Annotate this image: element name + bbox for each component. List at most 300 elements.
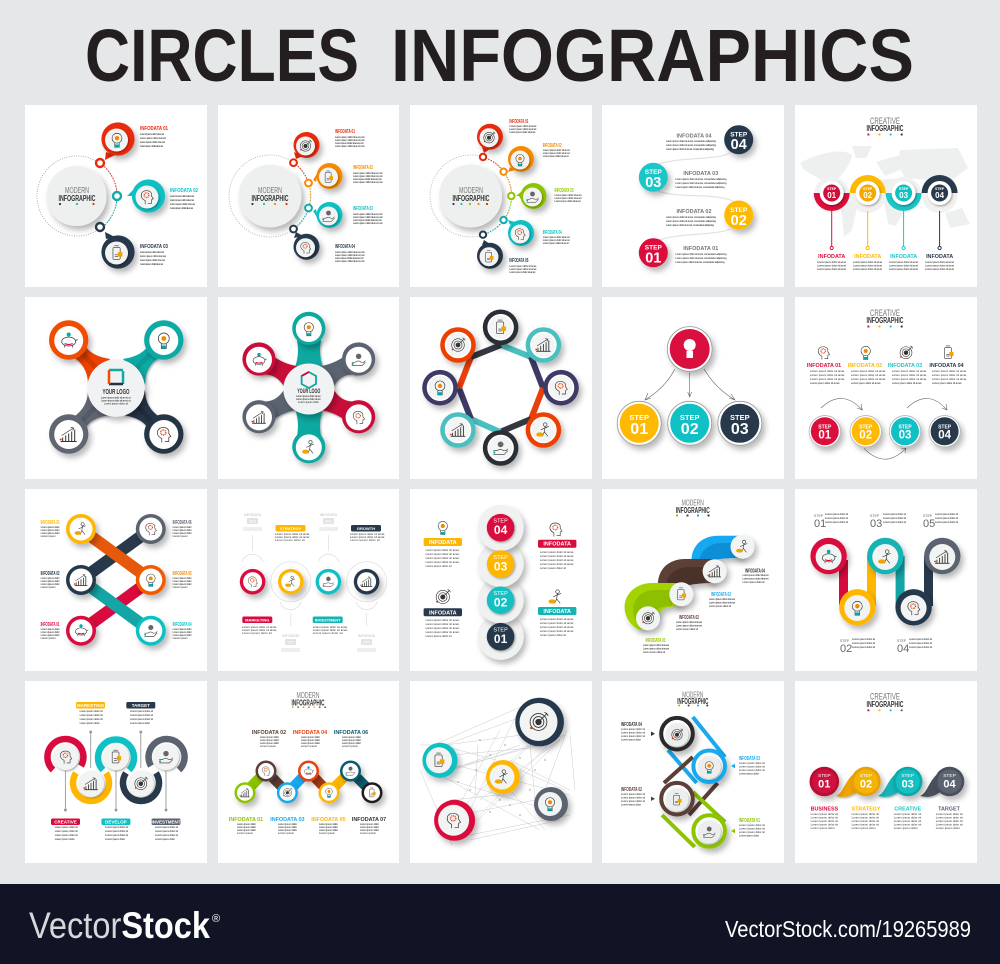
step captions: Lorem ipsum dolor sit xyxy=(825,516,848,520)
step captions: Lorem ipsum dolor sit xyxy=(935,520,958,524)
labels: Lorem ipsum dolor sit xyxy=(709,604,731,608)
labels xyxy=(509,119,582,274)
labels: Lorem ipsum dolor sit amet, con xyxy=(335,141,364,145)
labels: INFODATA 02 xyxy=(41,571,60,577)
labels: Lorem ipsum dolor sit amet xyxy=(676,624,702,628)
labels: INFODATA 02 xyxy=(621,787,642,793)
timeline discs: 03 xyxy=(899,191,909,200)
step 01: 01 xyxy=(494,632,508,646)
step 02 xyxy=(724,200,753,230)
coloured orbit arc xyxy=(483,157,511,235)
drop lines xyxy=(830,211,941,250)
info columns: Lorem ipsum dolor sit amet, xyxy=(892,373,927,377)
labels: INFODATA 01 xyxy=(41,622,60,628)
labels: Lorem ipsum dolor sit amet xyxy=(889,264,918,268)
labels: Lorem ipsum dolor xyxy=(894,826,918,830)
faded percent callouts xyxy=(243,513,376,652)
links xyxy=(245,771,372,793)
step 02: STEP xyxy=(493,591,508,597)
labels: Lorem ipsum dolor xyxy=(173,528,192,532)
centre logo disc: Lorem ipsum dolor sit amet, co xyxy=(101,396,132,400)
labels: INFODATA 03 xyxy=(554,188,574,194)
pills: GROWTH xyxy=(357,526,375,531)
labels: Lorem ipsum dolor sit xyxy=(936,819,963,823)
arcs xyxy=(47,739,185,801)
text blocks: Lorem ipsum dolor sit xyxy=(55,829,78,833)
step 02: 02 xyxy=(494,596,508,610)
labels xyxy=(140,126,198,266)
labels: Lorem ipsum dolor sit xyxy=(852,822,879,826)
step captions: Lorem ipsum dolor sit xyxy=(909,645,932,649)
labels: Lorem ipsum dolor xyxy=(621,738,641,742)
step 03: 03 xyxy=(494,559,508,573)
labels: Lorem ipsum dolor sit amet xyxy=(543,238,570,242)
info columns: Lorem ipsum dolor sit amet, xyxy=(851,369,886,373)
labels: Lorem ipsum dolor sit xyxy=(739,761,765,765)
labels: Lorem ipsum dolor sit amet, con xyxy=(335,253,366,257)
faded percent callouts: 50% xyxy=(249,520,256,524)
panel heading: INFOGRAPHIC xyxy=(866,700,904,709)
panel heading: MODERN xyxy=(682,498,704,508)
step captions: Lorem ipsum dolor sit xyxy=(883,520,906,524)
labels: INFODATA 02 xyxy=(252,730,286,736)
text blocks: Lorem ipsum dolor sit amet, xyxy=(540,554,574,558)
bubbles xyxy=(294,132,342,260)
dashed orbit xyxy=(430,155,512,237)
labels: Lorem ipsum dolor sit amet xyxy=(554,193,582,197)
text blocks: Lorem ipsum dolor sit xyxy=(105,829,128,833)
labels: Lorem ipsum dolor xyxy=(237,825,256,829)
central disc: INFOGRAPHIC xyxy=(452,194,490,203)
labels: Lorem ipsum dolor xyxy=(237,828,256,832)
text blocks: Lorem ipsum dolor sit amet, xyxy=(426,622,460,626)
labels: INFODATA 02 xyxy=(679,615,699,621)
labels: Lorem ipsum dolor xyxy=(936,826,960,830)
labels: INFODATA 06 xyxy=(334,730,368,736)
step captions: STEP xyxy=(814,514,824,518)
labels xyxy=(335,129,384,263)
chain links xyxy=(258,578,366,588)
labels: Lorem ipsum dolor sit xyxy=(621,796,645,800)
labels: CREATIVE xyxy=(894,806,922,812)
text blocks: Lorem ipsum dolor xyxy=(105,837,125,841)
step circles: 03 xyxy=(899,430,911,442)
nodes xyxy=(636,535,754,630)
labels: Lorem ipsum dolor sit amet xyxy=(925,260,954,264)
text blocks: Lorem ipsum dolor xyxy=(55,837,75,841)
step 03: STEP xyxy=(730,413,750,422)
labels: Lorem ipsum dolor sit amet xyxy=(543,241,569,245)
labels: Lorem ipsum dolor sit amet xyxy=(676,620,702,624)
centre logo disc: YOUR LOGO xyxy=(297,388,320,395)
labels: Lorem ipsum dolor sit amet xyxy=(140,132,164,136)
text blocks: Lorem ipsum dolor sit xyxy=(80,709,103,713)
centre logo disc: Lorem ipsum dolor sit am xyxy=(296,394,322,398)
text blocks xyxy=(242,532,385,635)
info columns: Lorem ipsum dolor sit amet, xyxy=(892,377,927,381)
bubble: teal xyxy=(127,179,165,213)
labels: Lorem ipsum dolor sit xyxy=(811,812,838,816)
text blocks: Lorem ipsum dolor sit xyxy=(275,538,305,542)
text blocks: Lorem ipsum dolor xyxy=(130,721,150,725)
panel: 5-step bubble diagram xyxy=(410,105,592,287)
text blocks: Lorem ipsum dolor xyxy=(155,837,175,841)
labels: Lorem ipsum dolor sit amet xyxy=(925,264,954,268)
bubble: red xyxy=(101,122,135,160)
central disc: INFOGRAPHIC xyxy=(58,194,96,203)
labels: Lorem ipsum dolor sit amet xyxy=(140,262,163,266)
labels: INFODATA 01 xyxy=(509,119,528,125)
info columns: Lorem ipsum dolor sit amet, xyxy=(810,373,845,377)
step 01 xyxy=(810,767,839,796)
step 03 xyxy=(639,163,668,192)
info columns: Lorem ipsum dolor sit amet, xyxy=(932,373,967,377)
labels: INFODATA 01 xyxy=(140,126,168,132)
labels: Lorem ipsum dolor sit amet xyxy=(543,235,570,239)
step 02: STEP xyxy=(860,773,872,779)
labels: Lorem ipsum dolor xyxy=(260,735,279,739)
labels: Lorem ipsum dolor sit xyxy=(936,822,963,826)
labels: Lorem ipsum dolor sit xyxy=(621,734,645,738)
text blocks: Lorem ipsum dolor sit xyxy=(313,631,343,635)
timeline discs: STEP xyxy=(827,187,837,191)
text blocks: Lorem ipsum dolor sit amet, xyxy=(540,558,574,562)
labels: Lorem ipsum dolor sit xyxy=(621,792,645,796)
orange node xyxy=(49,320,88,360)
labels: Lorem ipsum dolor sit amet, con xyxy=(353,171,384,175)
labels xyxy=(666,134,727,264)
labels: INFODATA 03 xyxy=(270,817,305,823)
text blocks: Lorem ipsum dolor sit amet, xyxy=(242,628,277,632)
step 02: 02 xyxy=(860,778,872,790)
arm nodes xyxy=(242,312,375,463)
leader lines xyxy=(64,731,167,811)
labels: Lorem ipsum dolor xyxy=(173,579,192,583)
labels: Lorem ipsum dolor sit amet xyxy=(140,140,165,144)
labels: INFODATA 03 xyxy=(140,244,168,250)
info columns: Lorem ipsum dolor sit amet, xyxy=(851,381,881,385)
labels: Lorem ipsum dolor sit xyxy=(621,799,645,803)
pills: INVESTMENT xyxy=(315,617,341,622)
labels: Lorem ipsum dolor sit amet xyxy=(170,206,193,210)
labels: Lorem ipsum dolor xyxy=(852,826,876,830)
text blocks: Lorem ipsum dolor sit amet, xyxy=(426,618,460,622)
labels: Lorem ipsum dolor sit amet xyxy=(543,151,570,155)
labels: INFODATA 01 xyxy=(646,638,666,644)
labels: INFODATA xyxy=(818,254,845,260)
labels: Lorem ipsum dolor xyxy=(173,630,192,634)
labels: Lorem ipsum dolor sit amet, consectetur adipiscing xyxy=(676,177,727,181)
timeline discs: STEP xyxy=(863,187,873,191)
labels: Lorem ipsum dolor xyxy=(319,828,338,832)
step 02 xyxy=(851,767,881,796)
step captions: STEP xyxy=(840,639,850,643)
step 01 xyxy=(639,238,668,267)
ring: blue xyxy=(693,750,725,782)
panel: twisted ribbon steps xyxy=(795,681,977,863)
labels: INFODATA 05 xyxy=(311,817,346,823)
labels: INFODATA 05 xyxy=(509,258,528,264)
panel heading xyxy=(866,692,904,711)
step circles: 02 xyxy=(859,430,872,442)
step 03: 03 xyxy=(731,421,749,438)
labels: Lorem ipsum dolor sit amet, con xyxy=(353,174,384,178)
centre logo disc: Lorem ipsum dolor xyxy=(298,400,319,404)
labels: Lorem ipsum dolor sit amet, consectetur adipiscing xyxy=(666,139,716,143)
labels: Lorem ipsum dolor xyxy=(41,531,60,535)
footer url: VectorStock.com/19265989 xyxy=(725,916,971,942)
info columns: Lorem ipsum dolor sit amet, xyxy=(932,369,967,373)
labels: Lorem ipsum dolor xyxy=(41,579,60,583)
text blocks: Lorem ipsum dolor sit xyxy=(155,829,178,833)
labels: Lorem ipsum dolor xyxy=(360,825,379,829)
info columns: Lorem ipsum dolor sit amet, xyxy=(851,373,886,377)
labels: INFODATA 04 xyxy=(293,730,327,736)
info columns: INFODATA 01 xyxy=(807,363,841,369)
pills xyxy=(424,538,576,616)
ring: brown xyxy=(661,783,693,814)
text blocks: Lorem ipsum dolor sit amet, xyxy=(426,560,460,564)
labels: Lorem ipsum dolor sit xyxy=(621,727,645,731)
labels: Lorem ipsum dolor sit xyxy=(811,819,838,823)
labels: Lorem ipsum dolor sit xyxy=(742,580,765,584)
labels: Lorem ipsum dolor xyxy=(260,741,279,745)
labels: Lorem ipsum dolor xyxy=(739,772,759,776)
labels: Lorem ipsum dolor sit xyxy=(739,768,765,772)
info columns: Lorem ipsum dolor sit amet, xyxy=(932,381,962,385)
panel heading xyxy=(676,498,710,516)
pills: MARKETING xyxy=(77,703,105,708)
labels: INFODATA 03 xyxy=(353,206,373,212)
node: crimson xyxy=(434,800,475,841)
labels: Lorem ipsum dolor sit amet xyxy=(170,202,195,206)
labels: Lorem ipsum xyxy=(173,636,188,640)
step 04 xyxy=(724,125,753,154)
links xyxy=(662,717,725,847)
panel: 4-arm molecule xyxy=(25,297,207,479)
step captions: 03 xyxy=(870,518,882,530)
step 04: 04 xyxy=(943,778,956,790)
footer bar xyxy=(0,884,1000,964)
labels: INFODATA 01 xyxy=(335,129,355,135)
title: INFOGRAPHICS xyxy=(391,14,914,97)
panel: world map timeline xyxy=(795,105,977,287)
panel: 4-step bubble diagram xyxy=(218,105,399,287)
labels: Lorem ipsum dolor xyxy=(342,741,361,745)
labels xyxy=(41,520,192,640)
labels xyxy=(229,730,386,835)
panel heading xyxy=(866,308,904,328)
step 03: STEP xyxy=(493,555,508,561)
labels: Lorem ipsum dolor xyxy=(319,825,338,829)
curl: brown xyxy=(658,559,714,600)
text blocks: Lorem ipsum dolor sit xyxy=(80,717,103,721)
labels: Lorem ipsum dolor sit amet, con xyxy=(335,250,366,254)
central disc xyxy=(239,165,301,227)
top bulb circle xyxy=(667,327,712,371)
panel: chain links xyxy=(602,681,784,863)
text blocks: Lorem ipsum dolor sit amet, xyxy=(540,625,574,629)
timeline discs: 04 xyxy=(935,191,945,200)
node: navy xyxy=(515,698,564,746)
footer logo: VectorStock xyxy=(29,905,210,946)
labels: Lorem ipsum dolor sit amet xyxy=(853,260,882,264)
orbit nodes xyxy=(290,159,312,232)
step 01: 01 xyxy=(630,421,648,438)
connector centre stripes xyxy=(80,351,153,423)
labels: Lorem ipsum dolor sit amet xyxy=(140,258,165,262)
labels: Lorem ipsum dolor xyxy=(360,822,379,826)
step circles: STEP xyxy=(938,424,952,430)
labels: Lorem ipsum dolor xyxy=(173,627,192,631)
text blocks xyxy=(426,548,574,638)
step 03: 03 xyxy=(645,175,661,191)
labels: INFODATA 01 xyxy=(683,246,718,252)
panel heading xyxy=(866,116,904,136)
panel heading xyxy=(292,691,326,708)
labels: Lorem ipsum dolor sit amet, consectetur adipiscing xyxy=(676,252,727,256)
labels: Lorem ipsum dolor sit xyxy=(852,816,879,820)
labels: Lorem ipsum dolor sit xyxy=(852,819,879,823)
step captions: Lorem ipsum dolor sit xyxy=(825,520,848,524)
light discs xyxy=(478,505,524,660)
step 01 xyxy=(617,401,661,445)
labels: Lorem ipsum dolor xyxy=(41,627,60,631)
labels: INFODATA 03 xyxy=(739,756,760,762)
step captions: 04 xyxy=(897,643,909,655)
labels: Lorem ipsum xyxy=(360,831,377,835)
faded percent callouts: 20% xyxy=(287,640,294,644)
labels: Lorem ipsum dolor sit amet xyxy=(889,260,918,264)
step 01: 01 xyxy=(645,250,661,266)
labels: Lorem ipsum dolor sit xyxy=(739,764,765,768)
step captions: Lorem ipsum dolor sit xyxy=(852,637,875,641)
labels: Lorem ipsum dolor sit amet xyxy=(643,643,669,647)
labels xyxy=(621,722,765,838)
faded percent callouts: INFODATA xyxy=(282,634,300,638)
icons xyxy=(818,346,954,360)
step 02 xyxy=(487,586,514,614)
labels: INFODATA 04 xyxy=(335,244,355,250)
labels: Lorem ipsum dolor sit amet, con xyxy=(353,221,384,225)
text blocks: Lorem ipsum dolor sit xyxy=(105,833,128,837)
info columns: Lorem ipsum dolor sit amet, xyxy=(810,369,845,373)
labels: Lorem ipsum dolor sit amet, con xyxy=(335,259,366,263)
timeline discs: 01 xyxy=(827,191,837,200)
dashed orbit xyxy=(229,155,311,237)
nodes xyxy=(234,760,382,803)
text blocks: Lorem ipsum dolor sit xyxy=(350,538,380,542)
labels: Lorem ipsum dolor xyxy=(41,528,60,532)
node: teal xyxy=(422,743,458,778)
panel heading: INFOGRAPHIC xyxy=(676,506,710,515)
labels: Lorem ipsum dolor sit amet xyxy=(509,124,537,128)
labels: Lorem ipsum dolor xyxy=(173,582,192,586)
pills: TARGET xyxy=(132,703,150,708)
text blocks: Lorem ipsum dolor sit xyxy=(105,825,128,829)
labels: Lorem ipsum dolor xyxy=(173,576,192,580)
labels: Lorem ipsum dolor xyxy=(342,738,361,742)
panel: 3-step bubble diagram xyxy=(25,105,207,287)
labels: INFODATA xyxy=(890,254,917,260)
labels: Lorem ipsum dolor xyxy=(278,828,297,832)
text blocks: Lorem ipsum dolor sit amet, xyxy=(275,535,310,539)
labels: INFODATA 07 xyxy=(352,817,386,823)
step 03 xyxy=(487,550,514,578)
labels: Lorem ipsum dolor sit xyxy=(739,826,765,830)
white discs xyxy=(53,744,179,797)
step 01 xyxy=(487,623,514,650)
step circles: STEP xyxy=(859,424,873,430)
network dots xyxy=(457,739,546,816)
centre logo disc: Lorem ipsum dolor sit amet, co xyxy=(101,398,132,402)
step captions: Lorem ipsum dolor sit xyxy=(935,516,958,520)
step captions: Lorem ipsum dolor sit xyxy=(883,512,906,516)
panel: 6-arm molecule xyxy=(218,297,399,479)
faded percent callouts: 20% xyxy=(363,640,370,644)
labels: Lorem ipsum dolor sit amet, con xyxy=(353,215,384,219)
step 04: 04 xyxy=(731,137,747,153)
timeline discs: STEP xyxy=(899,187,909,191)
labels: Lorem ipsum dolor sit amet xyxy=(817,267,846,271)
labels: Lorem ipsum dolor xyxy=(173,633,192,637)
labels: Lorem ipsum dolor xyxy=(811,826,835,830)
text blocks: Lorem ipsum dolor sit xyxy=(426,634,452,638)
info columns: Lorem ipsum dolor sit amet, xyxy=(932,377,967,381)
labels xyxy=(817,254,954,271)
text blocks: Lorem ipsum dolor sit amet, xyxy=(313,628,348,632)
bubble: navy xyxy=(101,232,135,269)
labels: INFODATA 03 xyxy=(41,520,60,526)
text blocks: Lorem ipsum dolor sit xyxy=(55,833,78,837)
labels: Lorem ipsum dolor sit amet xyxy=(543,154,569,158)
labels: Lorem ipsum dolor sit xyxy=(643,650,665,654)
step circles xyxy=(809,416,960,447)
labels: Lorem ipsum dolor sit amet, consectetur adipiscing xyxy=(666,143,716,147)
labels: Lorem ipsum dolor sit amet xyxy=(509,267,537,271)
labels: Lorem ipsum dolor sit amet xyxy=(817,264,846,268)
curl: green xyxy=(625,583,681,630)
labels: Lorem ipsum dolor sit amet, con xyxy=(335,256,364,260)
icons xyxy=(436,521,562,604)
central disc xyxy=(46,166,106,226)
labels: Lorem ipsum dolor sit xyxy=(811,822,838,826)
text blocks: Lorem ipsum dolor sit amet, xyxy=(313,625,348,629)
step circles: 01 xyxy=(818,430,832,442)
labels: Lorem ipsum dolor xyxy=(237,822,256,826)
panel: tree with three steps xyxy=(602,297,784,479)
labels: Lorem ipsum dolor sit amet, con xyxy=(353,180,384,184)
footer logo: ® xyxy=(212,913,220,925)
labels: Lorem ipsum dolor xyxy=(319,822,338,826)
text blocks: Lorem ipsum dolor sit amet, xyxy=(275,532,310,536)
labels: Lorem ipsum dolor sit amet xyxy=(643,646,669,650)
labels: Lorem ipsum dolor sit amet, consectetur adipiscing xyxy=(676,256,727,260)
arrows xyxy=(645,369,735,400)
panel: octagon ring xyxy=(410,297,592,479)
step 02 xyxy=(668,401,712,445)
step 02: STEP xyxy=(730,207,748,214)
labels: Lorem ipsum dolor sit amet xyxy=(140,254,166,258)
panel heading: INFOGRAPHIC xyxy=(292,698,325,708)
panel: network xyxy=(410,681,592,863)
panel heading: CREATIVE xyxy=(870,116,900,126)
faded percent callouts: INFODATA xyxy=(244,513,262,517)
timeline discs xyxy=(814,175,958,213)
labels: Lorem ipsum dolor sit amet xyxy=(509,130,536,134)
labels: Lorem ipsum dolor sit amet xyxy=(509,127,537,131)
labels: Lorem ipsum dolor xyxy=(41,525,60,529)
